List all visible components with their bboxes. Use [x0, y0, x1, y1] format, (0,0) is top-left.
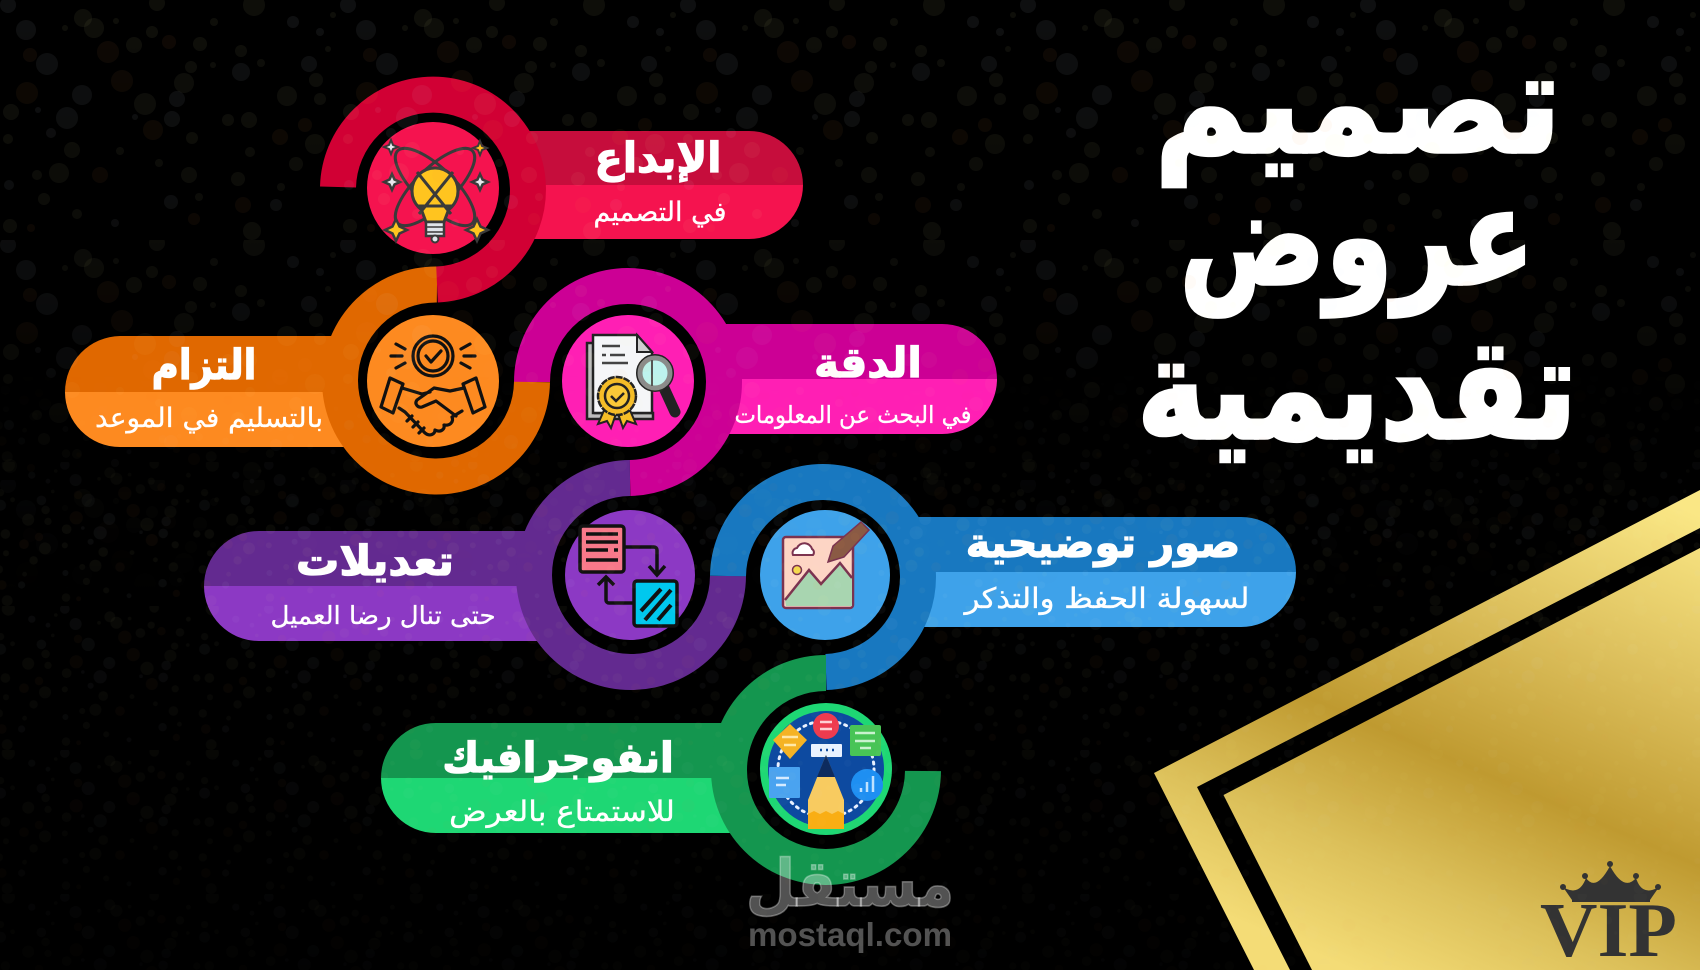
text: illustrations: لسهولة الحفظ والتذكر	[963, 582, 1249, 615]
title: تقديمية	[1137, 307, 1577, 472]
watermark: mostaql.com	[748, 916, 952, 953]
icon: infographic pencil	[760, 703, 892, 835]
text: illustrations: صور توضيحية	[966, 519, 1240, 568]
text: revisions	[270, 537, 496, 631]
text: accuracy: الدقة	[814, 338, 922, 387]
text: commitment	[95, 342, 323, 434]
text: infographic: للاستمتاع بالعرض	[449, 795, 675, 829]
icon: light bulb	[367, 122, 499, 254]
watermark: مستقل	[746, 846, 954, 922]
text: accuracy	[734, 338, 972, 429]
icon: picture and pencil	[760, 510, 890, 640]
text: revisions: حتى تنال رضا العميل	[270, 601, 496, 631]
text: creativity	[593, 134, 727, 228]
icon: handshake	[367, 315, 499, 447]
icon: certified document	[562, 315, 694, 447]
text: accuracy: في البحث عن المعلومات	[734, 400, 972, 429]
panel: connected rings	[338, 95, 923, 867]
icon: revision flow	[565, 510, 695, 640]
text: revisions: تعديلات	[296, 537, 454, 585]
title: عروض	[1179, 158, 1535, 318]
text: creativity: في التصميم	[593, 197, 727, 228]
text: infographic: انفوجرافيك	[442, 734, 674, 782]
text: illustrations	[963, 519, 1249, 615]
text: commitment: التزام	[152, 342, 256, 390]
title	[1137, 20, 1577, 472]
text: creativity: الإبداع	[595, 134, 721, 182]
gold corner frame	[1154, 490, 1700, 970]
title: تصميم	[1155, 20, 1561, 187]
text: infographic	[442, 734, 675, 829]
text: commitment: بالتسليم في الموعد	[95, 402, 323, 434]
panel: step bands	[65, 131, 1296, 833]
